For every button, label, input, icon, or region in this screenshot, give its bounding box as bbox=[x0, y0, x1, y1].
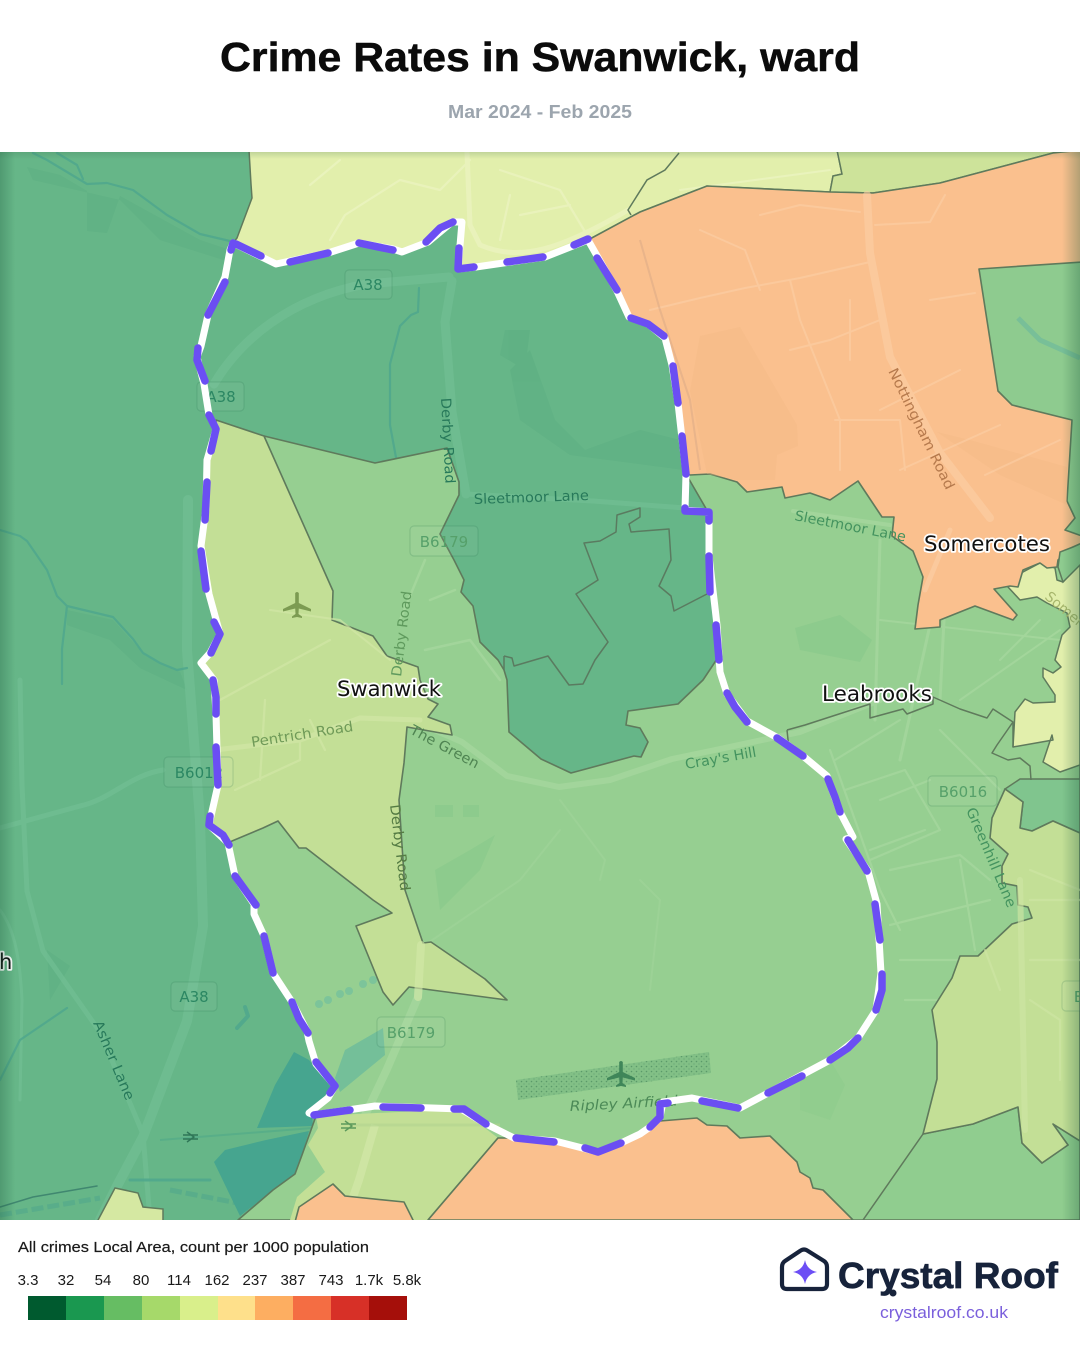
airfield strip bbox=[516, 1052, 711, 1100]
east boundary lines bbox=[787, 697, 1031, 780]
logo: url: crystalroof.co.uk bbox=[880, 1303, 1009, 1322]
road label: Cray's Hill: Cray's Hill bbox=[684, 745, 758, 773]
road label: Sleetmoor Lane east: Sleetmoor Lane bbox=[793, 508, 907, 545]
title: Crime Rates in Swanwick, ward bbox=[220, 34, 860, 80]
region: small green blob east bbox=[1058, 543, 1080, 582]
logo: house icon bbox=[782, 1250, 827, 1289]
roads in yellow-green bbox=[215, 610, 421, 997]
region: mid-green ward centre and east bbox=[229, 436, 1080, 1220]
icon: rail south bbox=[341, 1121, 356, 1131]
region: bottom-left yellow patch bbox=[97, 1188, 163, 1222]
pale area road details bbox=[310, 152, 830, 252]
road label: Derby Road west: Derby Road bbox=[389, 590, 415, 677]
road label: The Green: The Green bbox=[406, 722, 482, 772]
legend: scale labels: 80 bbox=[133, 1272, 149, 1289]
roads mid-green bbox=[362, 509, 1061, 1114]
road badge: A38 west: A38 bbox=[206, 388, 236, 406]
road badge: B6179 south bbox=[377, 1017, 445, 1047]
road badge: B6012 bbox=[164, 757, 233, 787]
map vignette bbox=[0, 152, 1080, 1220]
region: pond beside railway bbox=[335, 1028, 385, 1092]
place label: Somercotes: Somercotes bbox=[924, 532, 1050, 556]
road badge: B6179 north: B6179 bbox=[420, 533, 468, 551]
road badge: A38 north: A38 bbox=[353, 276, 383, 294]
icon: rail west bbox=[183, 1132, 198, 1142]
road badge: B6179 north bbox=[410, 526, 478, 556]
region: darker woodland west bbox=[27, 167, 684, 1000]
road label: Ripley Airfield: Ripley Airfield bbox=[569, 1093, 678, 1115]
region: yellow-green east bbox=[923, 789, 1080, 1163]
woods mid bbox=[435, 616, 872, 910]
region: orange south bbox=[428, 1118, 853, 1220]
region: green patch east bbox=[1005, 779, 1080, 833]
region: pale yellow north bbox=[233, 150, 842, 269]
road badge: right edge bbox=[1062, 981, 1080, 1011]
road label: Sleetmoor Lane: Sleetmoor Lane bbox=[474, 488, 589, 508]
legend: scale labels: 1.7k bbox=[355, 1272, 384, 1289]
road badge: B6012: B6012 bbox=[175, 764, 223, 782]
rail line west bbox=[160, 1127, 311, 1141]
ward boundary: purple dashes bbox=[197, 222, 882, 1152]
road badge: B6179 south: B6179 bbox=[387, 1024, 435, 1042]
place label: Swanwick: Swanwick bbox=[337, 677, 442, 701]
logo: wordmark: Crystal Roof bbox=[838, 1255, 1059, 1296]
panel: choropleth map bbox=[0, 150, 1080, 1222]
legend: scale labels: 3.3 bbox=[18, 1272, 38, 1289]
roads yellow-green east bbox=[985, 870, 1080, 1130]
road badge: A38 west bbox=[197, 382, 244, 411]
road label: Pentrich Road: Pentrich Road bbox=[250, 719, 354, 751]
region: yellow-green north-east bbox=[830, 150, 1060, 193]
road label: Derby Road north: Derby Road bbox=[437, 397, 457, 484]
region: teal very low crime areas bbox=[214, 1052, 330, 1216]
region: orange south small bbox=[295, 1184, 414, 1222]
legend: scale labels: 387 bbox=[280, 1272, 306, 1289]
region: mid-green patch east bottom bbox=[863, 1107, 1080, 1220]
icon: airfield plane south bbox=[607, 1061, 635, 1087]
legend: scale labels: 32 bbox=[58, 1272, 74, 1289]
rivers bbox=[0, 153, 445, 1207]
region: reservoir dots bbox=[315, 976, 377, 1008]
legend: scale labels bbox=[18, 1272, 422, 1289]
road label: Derby Road south: Derby Road bbox=[386, 804, 413, 892]
place label: Leabrooks: Leabrooks bbox=[822, 682, 932, 706]
ward boundary: white base bbox=[197, 222, 881, 1152]
legend: scale labels: 237 bbox=[242, 1272, 268, 1289]
legend: scale labels: 54 bbox=[95, 1272, 111, 1289]
road label: Asher Lane: Asher Lane bbox=[89, 1018, 137, 1103]
road south railway bbox=[350, 1126, 378, 1196]
legend: title: All crimes Local Area, count per 1000 population bbox=[18, 1239, 369, 1256]
road badge: A38 south: A38 bbox=[179, 988, 209, 1006]
road label: Greenhill Lane: Greenhill Lane bbox=[962, 805, 1019, 910]
legend: scale labels: 114 bbox=[167, 1272, 191, 1289]
region: dark-green block outline inside ward bbox=[504, 508, 707, 685]
legend: scale labels: 162 bbox=[204, 1272, 230, 1289]
legend: scale labels: 743 bbox=[318, 1272, 344, 1289]
region: low crime base area bbox=[0, 152, 716, 1220]
road badge: B6016 bbox=[928, 776, 997, 806]
road badge: A38 north bbox=[345, 270, 392, 299]
roads west bbox=[47, 684, 187, 981]
road badge: B6016: B6016 bbox=[939, 783, 987, 801]
region: yellow-green Swanwick west bbox=[201, 420, 507, 1005]
region: pale yellow east bbox=[1008, 563, 1080, 772]
road label: Nottingham Road: Nottingham Road bbox=[884, 366, 957, 492]
legend: scale labels: 5.8k bbox=[393, 1272, 422, 1289]
subtitle: date range: Mar 2024 - Feb 2025 bbox=[448, 102, 632, 122]
region: yellow-green south bbox=[290, 1109, 498, 1220]
region: orange north Somercotes bbox=[588, 150, 1080, 629]
orange streets and woods bbox=[707, 473, 1067, 502]
icon: airfield plane west bbox=[283, 592, 311, 618]
legend: colour bar bbox=[28, 1296, 407, 1320]
region: east green box under orange bbox=[975, 262, 1080, 542]
road badge: A38 south bbox=[171, 982, 217, 1011]
east pond stream bbox=[1018, 318, 1080, 358]
